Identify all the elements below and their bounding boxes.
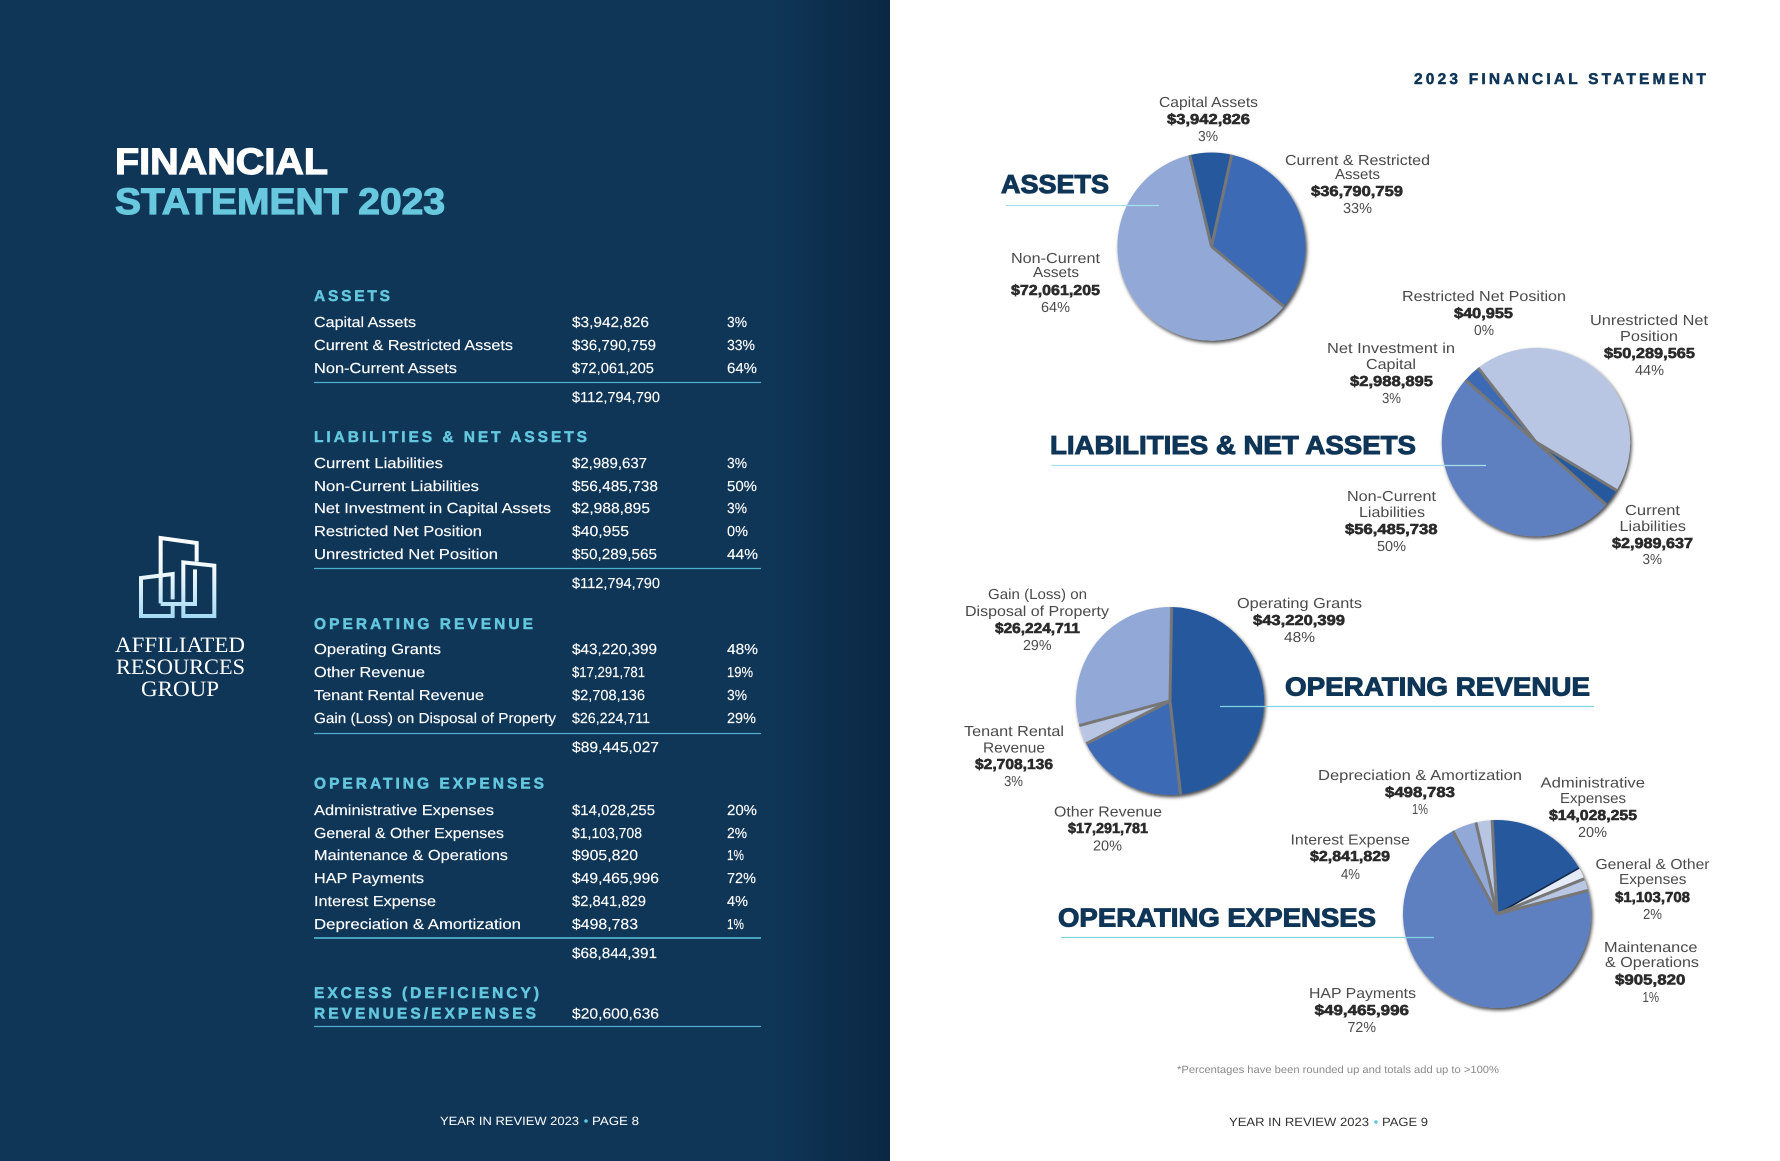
- table section: operating expenses: 1%: [727, 917, 744, 933]
- table section: operating expenses: Interest Expense: [314, 894, 436, 910]
- table section: operating expenses: $14,028,255: [572, 803, 655, 819]
- label: current liabilities: [1612, 503, 1693, 568]
- label: current and restricted assets: 33%: [1343, 201, 1372, 217]
- table section: excess (deficiency): [314, 985, 761, 1026]
- label: maintenance and operations: & Operations: [1605, 955, 1699, 971]
- table section: liabilities and net assets: 3%: [727, 501, 747, 517]
- pie chart: operating revenue: [1076, 607, 1264, 795]
- table section: assets: ASSETS: [314, 288, 390, 305]
- label: non-current liabilities: Liabilities: [1359, 505, 1425, 521]
- pie chart: liabilities and net assets: [1442, 348, 1630, 536]
- page header: 2023 financial statement: 2023 FINANCIAL STATEMENT: [1414, 71, 1707, 88]
- table section: operating expenses: $2,841,829: [572, 894, 646, 910]
- table section: operating revenue: 29%: [727, 711, 756, 727]
- table section: liabilities and net assets: Net Investment in Capital Assets: [314, 501, 551, 517]
- label: hap payments: $49,465,996: [1315, 1003, 1409, 1019]
- label: interest expense: 4%: [1341, 867, 1360, 883]
- label: current liabilities: Current: [1625, 503, 1680, 519]
- label: current and restricted assets: [1285, 153, 1430, 217]
- table section: assets: Current & Restricted Assets: [314, 338, 513, 354]
- table section: excess (deficiency): EXCESS (DEFICIENCY): [314, 985, 539, 1002]
- heading: liabilities and net assets: LIABILITIES & NET ASSETS: [1050, 430, 1416, 460]
- label: unrestricted net position: $50,289,565: [1604, 346, 1695, 362]
- label: capital assets: [1159, 95, 1258, 145]
- label: general and other expenses: [1596, 857, 1710, 923]
- pie chart: assets: [1117, 153, 1305, 341]
- label: administrative expenses: Administrative: [1540, 776, 1645, 792]
- table section: operating expenses: $905,820: [572, 848, 638, 864]
- table section: operating expenses: 2%: [727, 826, 747, 842]
- table section: liabilities and net assets: Unrestricted Net Position: [314, 547, 498, 563]
- label: general and other expenses: 2%: [1643, 907, 1662, 923]
- table section: operating revenue: $17,291,781: [572, 665, 645, 681]
- label: maintenance and operations: $905,820: [1615, 973, 1685, 989]
- table section: operating expenses: 20%: [727, 803, 757, 819]
- panel: right page background: [890, 0, 1780, 1161]
- table section: liabilities and net assets: 3%: [727, 456, 747, 472]
- table section: liabilities and net assets: $2,988,895: [572, 501, 650, 517]
- label: other revenue: [1054, 804, 1162, 854]
- label: tenant rental revenue: Tenant Rental: [964, 724, 1064, 740]
- label: non-current assets: [1011, 251, 1100, 316]
- label: other revenue: 20%: [1093, 838, 1122, 854]
- label: non-current assets: Non-Current: [1011, 251, 1100, 267]
- table section: operating expenses: [314, 776, 761, 962]
- table section: assets: Capital Assets: [314, 315, 416, 331]
- table section: operating revenue: $43,220,399: [572, 642, 657, 658]
- table section: operating expenses: $1,103,708: [572, 826, 642, 842]
- table section: assets: 64%: [727, 361, 757, 377]
- table section: assets: $112,794,790: [572, 390, 660, 406]
- table section: operating expenses: General & Other Expenses: [314, 826, 504, 842]
- title: [115, 141, 445, 222]
- table section: operating expenses: OPERATING EXPENSES: [314, 776, 544, 792]
- label: administrative expenses: [1540, 776, 1645, 841]
- table section: operating expenses: $68,844,391: [572, 946, 657, 962]
- table section: operating revenue: [314, 616, 761, 756]
- label: restricted net position: [1402, 289, 1566, 339]
- label: administrative expenses: 20%: [1578, 825, 1607, 841]
- table section: operating revenue: 3%: [727, 688, 747, 704]
- table section: operating expenses: Administrative Expenses: [314, 803, 494, 819]
- table section: liabilities and net assets: 50%: [727, 479, 757, 495]
- label: other revenue: Other Revenue: [1054, 804, 1162, 820]
- label: operating grants: $43,220,399: [1253, 613, 1345, 629]
- table section: operating revenue: Gain (Loss) on Disposal of Property: [314, 711, 557, 727]
- table section: operating revenue: Tenant Rental Revenue: [314, 688, 484, 704]
- table section: liabilities and net assets: LIABILITIES & NET ASSETS: [314, 429, 587, 446]
- label: restricted net position: Restricted Net Position: [1402, 289, 1566, 305]
- label: current liabilities: 3%: [1642, 552, 1662, 568]
- label: administrative expenses: $14,028,255: [1549, 808, 1637, 824]
- table section: liabilities and net assets: $40,955: [572, 524, 629, 540]
- table section: assets: [314, 288, 761, 406]
- table section: operating revenue: Operating Grants: [314, 642, 441, 658]
- footer: left page: [440, 1114, 639, 1128]
- table section: assets: 3%: [727, 315, 747, 331]
- label: general and other expenses: $1,103,708: [1615, 890, 1690, 906]
- table section: liabilities and net assets: 44%: [727, 547, 758, 563]
- label: interest expense: $2,841,829: [1310, 849, 1390, 865]
- table section: operating expenses: $498,783: [572, 917, 638, 933]
- table section: liabilities and net assets: 0%: [727, 524, 748, 540]
- footnote: *Percentages have been rounded up and totals add up to >100%: [1177, 1064, 1499, 1076]
- text: company name: [115, 632, 245, 701]
- label: gain or loss on disposal of property: Gain (Loss) on: [988, 587, 1087, 603]
- table section: operating revenue: 19%: [727, 665, 753, 681]
- text: company name: GROUP: [141, 676, 219, 701]
- label: current and restricted assets: $36,790,759: [1311, 184, 1403, 200]
- label: non-current liabilities: $56,485,738: [1345, 522, 1438, 538]
- label: tenant rental revenue: 3%: [1004, 774, 1023, 790]
- label: net investment in capital: [1327, 341, 1455, 407]
- label: gain or loss on disposal of property: $26,224,711: [995, 621, 1080, 637]
- label: other revenue: $17,291,781: [1068, 821, 1148, 837]
- text: company name: AFFILIATED: [115, 632, 245, 657]
- table section: operating revenue: $26,224,711: [572, 711, 650, 727]
- footer: left page: YEAR IN REVIEW 2023: [440, 1114, 579, 1128]
- table section: liabilities and net assets: Current Liabilities: [314, 456, 443, 472]
- table section: operating revenue: Other Revenue: [314, 665, 425, 681]
- footer: right page: YEAR IN REVIEW 2023: [1229, 1115, 1369, 1129]
- label: maintenance and operations: [1604, 940, 1699, 1006]
- table section: operating revenue: $2,708,136: [572, 688, 645, 704]
- table section: liabilities and net assets: Restricted Net Position: [314, 524, 482, 540]
- label: depreciation and amortization: 1%: [1412, 802, 1428, 818]
- label: hap payments: [1309, 986, 1416, 1036]
- label: general and other expenses: Expenses: [1619, 872, 1686, 888]
- icon: company logo: [115, 538, 245, 701]
- label: operating grants: [1237, 596, 1362, 646]
- label: restricted net position: 0%: [1474, 323, 1494, 339]
- table section: excess (deficiency): REVENUES/EXPENSES: [314, 1006, 536, 1022]
- table section: liabilities and net assets: Non-Current Liabilities: [314, 479, 479, 495]
- label: depreciation and amortization: $498,783: [1385, 785, 1455, 801]
- table section: liabilities and net assets: $2,989,637: [572, 456, 647, 472]
- table section: operating expenses: 4%: [727, 894, 748, 910]
- footer: right page: [1229, 1115, 1428, 1129]
- title: STATEMENT 2023: [115, 181, 445, 222]
- table section: assets: 33%: [727, 338, 755, 354]
- table section: operating expenses: 1%: [727, 848, 744, 864]
- label: capital assets: $3,942,826: [1167, 112, 1250, 128]
- label: non-current liabilities: Non-Current: [1347, 489, 1436, 505]
- label: depreciation and amortization: Depreciation & Amortization: [1318, 768, 1522, 784]
- table section: operating revenue: OPERATING REVENUE: [314, 616, 533, 633]
- footer: left page: PAGE 8: [592, 1114, 639, 1128]
- label: current liabilities: $2,989,637: [1612, 536, 1693, 552]
- label: depreciation and amortization: [1318, 768, 1522, 818]
- label: current and restricted assets: Assets: [1335, 167, 1380, 183]
- table section: liabilities and net assets: $112,794,790: [572, 576, 660, 592]
- label: capital assets: 3%: [1198, 129, 1218, 145]
- label: current liabilities: Liabilities: [1620, 519, 1686, 535]
- label: restricted net position: $40,955: [1454, 306, 1513, 322]
- table section: assets: $36,790,759: [572, 338, 656, 354]
- heading: operating expenses: OPERATING EXPENSES: [1058, 902, 1376, 932]
- table section: liabilities and net assets: [314, 429, 761, 592]
- label: non-current liabilities: [1345, 489, 1438, 555]
- label: hap payments: HAP Payments: [1309, 986, 1416, 1002]
- label: unrestricted net position: 44%: [1635, 363, 1664, 379]
- table section: assets: $3,942,826: [572, 315, 649, 331]
- label: gain or loss on disposal of property: 29%: [1023, 638, 1052, 654]
- label: net investment in capital: Net Investment in: [1327, 341, 1455, 357]
- table section: operating expenses: Depreciation & Amortization: [314, 917, 521, 933]
- table section: operating expenses: $49,465,996: [572, 871, 659, 887]
- table section: liabilities and net assets: $56,485,738: [572, 479, 658, 495]
- label: unrestricted net position: Position: [1620, 329, 1678, 345]
- heading: operating revenue: OPERATING REVENUE: [1285, 672, 1590, 702]
- icon: buildings mark: [141, 538, 214, 616]
- table section: excess (deficiency): $20,600,636: [572, 1006, 659, 1022]
- label: non-current assets: Assets: [1033, 265, 1079, 281]
- title: FINANCIAL: [115, 141, 328, 182]
- table section: operating revenue: $89,445,027: [572, 740, 659, 756]
- label: general and other expenses: General & Other: [1596, 857, 1710, 873]
- label: interest expense: Interest Expense: [1290, 832, 1410, 848]
- label: gain or loss on disposal of property: [965, 587, 1110, 654]
- table section: operating expenses: 72%: [727, 871, 756, 887]
- label: net investment in capital: $2,988,895: [1350, 374, 1433, 390]
- panel: left page background: [0, 0, 890, 1161]
- label: operating grants: Operating Grants: [1237, 596, 1362, 612]
- label: capital assets: Capital Assets: [1159, 95, 1258, 111]
- heading: assets: ASSETS: [1001, 169, 1109, 199]
- label: net investment in capital: 3%: [1382, 391, 1401, 407]
- label: tenant rental revenue: $2,708,136: [975, 757, 1053, 773]
- pie chart: operating expenses: [1403, 820, 1591, 1008]
- table section: assets: Non-Current Assets: [314, 361, 457, 377]
- label: tenant rental revenue: [964, 724, 1064, 790]
- table section: operating revenue: 48%: [727, 642, 758, 658]
- label: current and restricted assets: Current & Restricted: [1285, 153, 1430, 169]
- text: company name: RESOURCES: [116, 654, 245, 679]
- label: administrative expenses: Expenses: [1560, 791, 1626, 807]
- label: maintenance and operations: Maintenance: [1604, 940, 1698, 956]
- label: unrestricted net position: Unrestricted Net: [1590, 313, 1708, 329]
- table section: liabilities and net assets: $50,289,565: [572, 547, 657, 563]
- table section: operating expenses: HAP Payments: [314, 871, 424, 887]
- label: gain or loss on disposal of property: Disposal of Property: [965, 604, 1110, 620]
- label: operating grants: 48%: [1284, 630, 1315, 646]
- label: tenant rental revenue: Revenue: [983, 740, 1045, 756]
- label: interest expense: [1290, 832, 1410, 883]
- label: maintenance and operations: 1%: [1642, 990, 1659, 1006]
- label: hap payments: 72%: [1348, 1020, 1376, 1036]
- footer: right page: PAGE 9: [1382, 1115, 1428, 1129]
- table section: operating expenses: Maintenance & Operations: [314, 848, 508, 864]
- label: net investment in capital: Capital: [1366, 357, 1416, 373]
- label: non-current assets: $72,061,205: [1011, 283, 1100, 299]
- label: unrestricted net position: [1590, 313, 1708, 379]
- label: non-current liabilities: 50%: [1377, 539, 1406, 555]
- table section: assets: $72,061,205: [572, 361, 654, 377]
- label: non-current assets: 64%: [1041, 300, 1070, 316]
